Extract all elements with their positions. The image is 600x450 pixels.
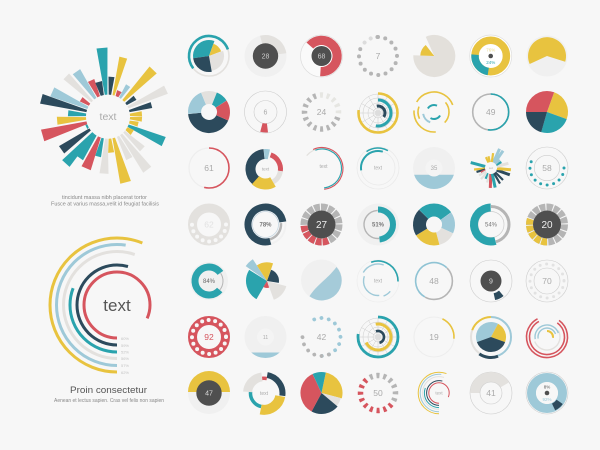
value 7: 7 — [376, 51, 381, 61]
chart r7c6: 41 — [470, 372, 512, 414]
value 49: 49 — [486, 107, 496, 117]
chart r7c3: pie — [307, 378, 336, 408]
value 92%: 92% — [542, 397, 552, 402]
chart r7c4: dashes 50 — [353, 368, 403, 418]
label text: text — [260, 391, 269, 397]
chart r3c2: text ring — [244, 148, 287, 190]
chart r7c5: mini concentric arcs — [418, 372, 460, 414]
chart r3c6: mini burst — [471, 149, 511, 188]
chart r2c5: yellow and teal arcs — [407, 85, 461, 139]
chart r6c6: pie with segmented ring — [463, 309, 519, 365]
chart r6c7: red arcs — [518, 308, 576, 366]
value 11: 11 — [263, 335, 268, 341]
label text: text — [262, 166, 270, 172]
chart r7c7: 8% / 92% donut — [525, 371, 569, 415]
chart r6c4: spider with teal arc — [358, 317, 398, 357]
value 9: 9 — [489, 278, 493, 286]
chart r1c7: yellow chevron circle — [526, 36, 568, 76]
burst caption: Fusce at varius massa,velit id feugiat facilisis — [51, 202, 160, 208]
chart r2c6: 49 — [473, 94, 509, 130]
value 48: 48 — [429, 276, 439, 286]
chart r6c1: 92 — [192, 320, 226, 354]
value 24%: 24% — [486, 60, 495, 65]
value 84%: 84% — [203, 279, 216, 285]
chart r3c4: text teal arcs — [350, 140, 406, 196]
value 92: 92 — [204, 332, 214, 342]
chart r2c3: dashes 24 — [300, 91, 343, 133]
chart r4c2: 78% — [244, 203, 287, 246]
label text: text — [374, 166, 383, 172]
chart r3c5: 35 — [413, 147, 455, 189]
chart r3c1: 61 — [189, 148, 229, 188]
burst caption: tincidunt massa nibh placerat tortor — [62, 195, 147, 201]
burst center label: text — [100, 111, 117, 123]
chart r5c7: 70 — [526, 260, 568, 302]
arc percentage labels: 62% — [121, 370, 129, 375]
chart r3c7: 58 — [526, 147, 568, 189]
chart r4c5: donut — [413, 204, 455, 245]
value 50: 50 — [373, 388, 383, 398]
chart r6c2: 11 — [244, 316, 286, 358]
heading: Proin consectetur: Proin consectetur — [70, 385, 147, 396]
value 61: 61 — [204, 163, 214, 173]
chart r4c1: 62 — [192, 208, 226, 242]
burst caption — [51, 195, 160, 208]
chart r4c3: 27 block ring — [299, 202, 344, 247]
chart r4c7: 20 block ring — [530, 207, 564, 242]
chart r1c4: dotted 7 — [351, 29, 405, 83]
arc center label: text — [103, 296, 131, 315]
chart r7c2: text ring — [243, 372, 285, 415]
value 47: 47 — [205, 390, 213, 398]
arc percentage labels: 57% — [121, 363, 129, 368]
chart r2c1: multicolor donut — [189, 92, 229, 132]
arc percentage labels: 56% — [121, 356, 129, 361]
chart r4c4: 51% — [357, 204, 399, 246]
value 35: 35 — [431, 166, 438, 172]
value 19: 19 — [429, 332, 439, 342]
arc percentage labels: 52% — [121, 350, 129, 354]
value 28: 28 — [262, 54, 269, 60]
chart r2c2: 6 — [244, 91, 286, 133]
chart r1c3: 68 — [300, 34, 343, 78]
label text: text — [435, 390, 443, 396]
value 20: 20 — [541, 220, 553, 231]
value 6: 6 — [264, 110, 268, 116]
value 51%: 51% — [372, 223, 385, 229]
chart r5c4: text blue arcs — [352, 255, 404, 307]
arc percentage labels — [121, 336, 129, 375]
chart r6c5: 19 — [407, 310, 461, 364]
chart r5c3: diagonal fill circle — [301, 260, 342, 300]
chart r5c2: rose chart — [249, 263, 285, 299]
chart r5c5: 48 — [408, 255, 460, 307]
value 24: 24 — [317, 107, 326, 117]
value 54%: 54% — [485, 223, 498, 229]
chart r1c6: 76% / 24% donut — [470, 35, 512, 77]
concentric arc chart — [50, 238, 184, 372]
chart r3c3: text arcs — [294, 140, 350, 197]
label text: text — [319, 164, 328, 170]
value 76%: 76% — [486, 47, 495, 52]
value 70: 70 — [542, 276, 552, 286]
chart r4c6: 54% — [470, 204, 512, 245]
chart r7c1: 47 — [188, 371, 230, 414]
value 8%: 8% — [544, 384, 550, 389]
value 27: 27 — [316, 220, 327, 231]
value 42: 42 — [317, 332, 326, 342]
value 41: 41 — [486, 388, 496, 398]
chart r1c1: pie with teal ring — [181, 28, 237, 84]
value 68: 68 — [318, 54, 325, 60]
chart r1c2: 28 — [244, 35, 286, 77]
value 78%: 78% — [259, 223, 272, 229]
value 58: 58 — [542, 163, 552, 173]
arc percentage labels: 60% — [121, 336, 129, 341]
chart r5c6: 9 — [468, 258, 514, 304]
value 62: 62 — [204, 220, 214, 230]
chart r2c4: spider with arcs — [358, 94, 398, 132]
label text: text — [374, 278, 383, 284]
subheading: Aenean et lectus sapien. Cras vel felis non sapien — [54, 398, 164, 404]
chart r2c7: pie — [534, 99, 560, 125]
radial burst chart — [40, 47, 168, 184]
chart r6c3: dotted 42 — [297, 312, 346, 362]
chart r1c5: gray pie with yellow wedge — [420, 42, 448, 70]
chart r5c1: 84% — [189, 261, 229, 301]
arc percentage labels: 59% — [121, 343, 129, 348]
label text: text — [489, 167, 493, 170]
